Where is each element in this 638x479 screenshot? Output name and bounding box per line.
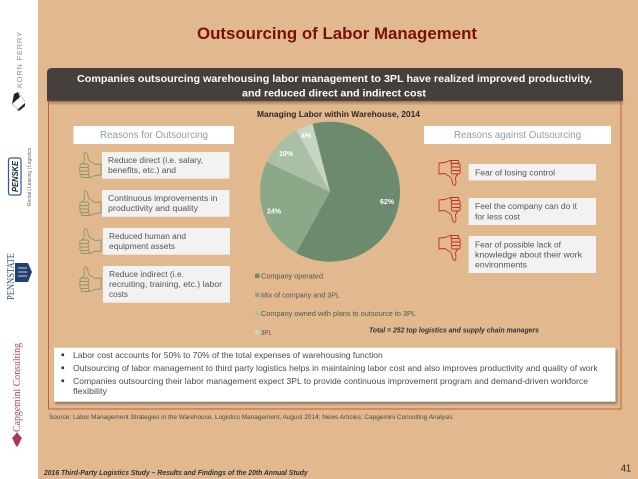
against reason 3: knowledge about their work [475, 250, 583, 260]
banner text: Companies outsourcing warehousing labor management to 3PL have realized improved productivity, [77, 74, 592, 85]
bullet 3 [62, 377, 588, 396]
panel: reasons for outsourcing [74, 126, 234, 303]
reason 3 [79, 228, 230, 255]
against reason 2: Feel the company can do it [475, 202, 578, 211]
bullet 1: Labor cost accounts for 50% to 70% of the total expenses of warehousing function [73, 351, 383, 360]
reason 4: recruiting, training, etc.) labor [109, 280, 222, 289]
logo: Penn State [6, 253, 32, 300]
reason 1 [79, 152, 230, 179]
banner text: and reduced direct and indirect cost [242, 88, 427, 100]
logo: Korn Ferry: KORN FERRY [15, 32, 24, 88]
reason 2: productivity and quality [108, 204, 198, 213]
against reason 3: Fear of possible lack of [475, 240, 562, 250]
logo: Korn Ferry [12, 32, 25, 111]
chart legend [255, 272, 416, 337]
logo: Penske [8, 148, 33, 206]
chart legend: Company owned with plans to outsource to 3PL [261, 309, 416, 318]
pie chart [260, 122, 400, 262]
reason 4 [79, 266, 230, 303]
against reason 1: Fear of losing control [475, 168, 555, 178]
heading: reasons against: Reasons against Outsourcing [454, 130, 581, 141]
slice: 3PL 4% [296, 124, 330, 192]
header banner [47, 68, 623, 104]
against reason 1 [439, 160, 596, 186]
heading: reasons for: Reasons for Outsourcing [100, 130, 208, 141]
slice: company operated 62% [296, 122, 400, 262]
against reason 2 [439, 198, 596, 225]
against reason 3 [439, 236, 596, 273]
against reason 3: environments [475, 260, 527, 270]
reason 2 [79, 190, 230, 217]
logo: Capgemini Consulting: Capgemini Consulting [11, 343, 23, 432]
banner text [77, 74, 592, 100]
reason 3: equipment assets [109, 242, 175, 251]
sidebar: sponsor logos [0, 0, 38, 479]
percentage labels: 62% [380, 199, 395, 206]
chart title: Managing Labor within Warehouse, 2014 [257, 109, 420, 119]
page number: 41 [621, 464, 632, 474]
reason 2: Continuous improvements in [108, 194, 218, 203]
chart legend: Mix of company and 3PL [261, 290, 340, 300]
source note: Source: Labor Management Strategies in the Warehouse, Logistics Management, August 2014; News Articles; Capgemini Consulting Analysis [49, 414, 453, 421]
panel: reasons against outsourcing [424, 126, 611, 273]
reason 1: benefits, etc.) and [108, 166, 176, 175]
bullet 3: flexibility [73, 387, 108, 396]
bullet 2: Outsourcing of labor management to third party logistics helps in maintaining labor cost and also improves productivity and quality of work [73, 364, 599, 373]
logo: Penske: Rental | Leasing | Logistics [27, 148, 33, 206]
heading: reasons for [74, 126, 234, 144]
red content frame [48, 101, 621, 409]
chart legend: 3PL [261, 328, 272, 337]
percentage labels [267, 133, 395, 216]
against reason 2: for less cost [475, 212, 521, 222]
chart legend: Company operated [261, 272, 323, 280]
reason 4: Reduce indirect (i.e. [109, 270, 184, 279]
heading: reasons against [424, 126, 611, 144]
percentage labels: 10% [279, 151, 294, 158]
reason 1: Reduce direct (i.e. salary, [108, 156, 203, 165]
footer study title: 2016 Third-Party Logistics Study – Results and Findings of the 20th Annual Study [43, 468, 309, 477]
sample size note: Total = 252 top logistics and supply chain managers [369, 328, 539, 334]
key takeaways box [54, 348, 617, 404]
title: Outsourcing of Labor Management [197, 25, 478, 43]
slice: plans to outsource 10% [267, 130, 330, 192]
reason 3: Reduced human and [109, 232, 186, 241]
percentage labels: 4% [301, 133, 312, 140]
reason 4: costs [109, 290, 128, 299]
bullet 3: Companies outsourcing their labor management expect 3PL to provide continuous improvement program and demand-driven workforce [73, 377, 588, 386]
logo: Penske: PENSKE [11, 160, 20, 192]
slice: mix 24% [260, 162, 330, 253]
logo: Penn State: PENNSTATE [6, 253, 17, 300]
percentage labels: 24% [267, 208, 282, 216]
